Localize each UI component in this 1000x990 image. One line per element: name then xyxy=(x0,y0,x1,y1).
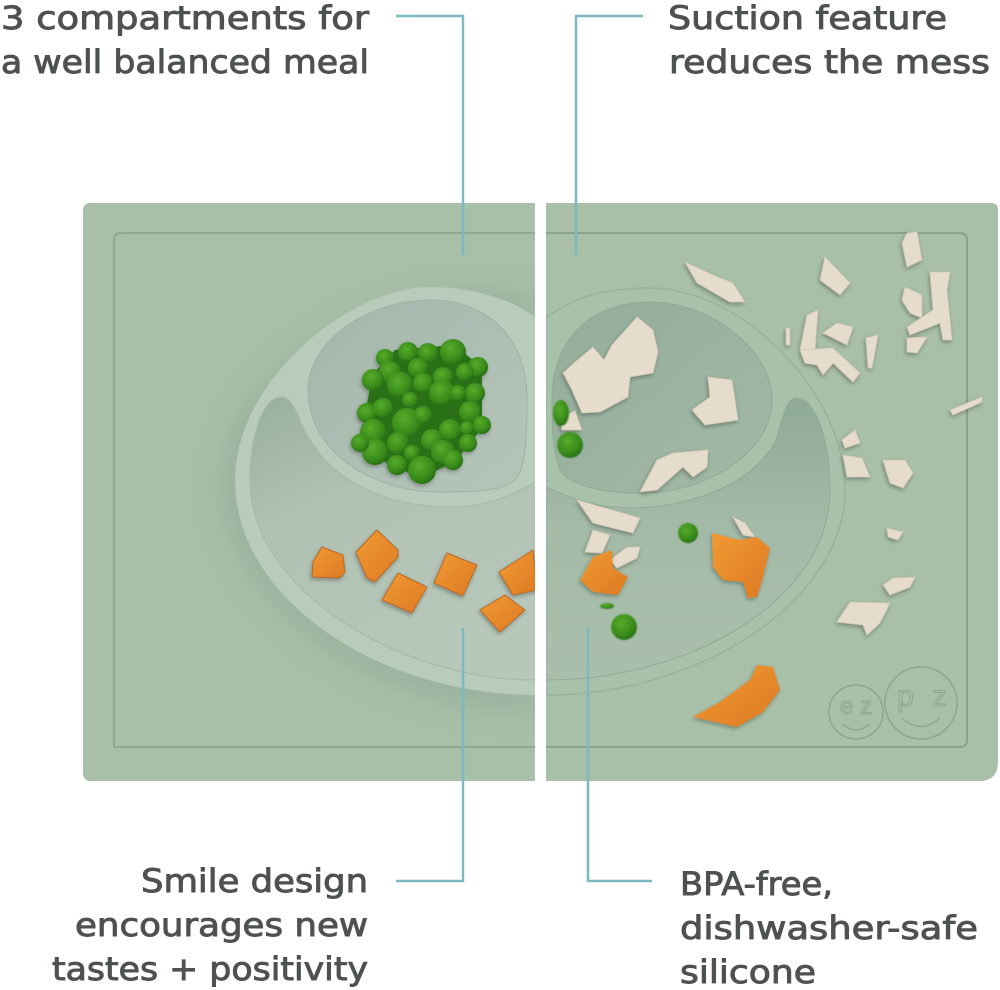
sweet potato pieces xyxy=(312,530,537,632)
logo: ezpz embossed: pz xyxy=(897,680,947,713)
callout: smile design: tastes + positivity xyxy=(52,950,368,988)
callout: silicone: BPA-free, xyxy=(680,865,833,903)
panel: left half of mat with peas and sweet potato xyxy=(83,203,553,781)
callout: smile design: encourages new xyxy=(75,906,368,944)
upper compartment left xyxy=(308,300,527,492)
green peas right xyxy=(553,400,698,640)
panel: right half of mat with scattered food xyxy=(546,203,998,781)
mat right surface xyxy=(546,203,998,781)
callout lines xyxy=(396,16,652,881)
lower compartment left xyxy=(250,397,535,680)
callout: compartments: a well balanced meal xyxy=(1,43,369,81)
bowl rim left xyxy=(235,287,535,695)
callout: silicone xyxy=(680,865,978,990)
callout: compartments xyxy=(1,0,370,81)
lower compartment right xyxy=(546,398,830,680)
callout: suction: Suction feature xyxy=(668,0,947,37)
logo: ezpz embossed: ez xyxy=(840,693,872,720)
orange food pieces xyxy=(580,533,780,727)
mat left surface xyxy=(83,203,553,781)
callout: silicone: dishwasher-safe xyxy=(680,909,978,947)
upper compartment right xyxy=(552,302,772,493)
callout: smile design xyxy=(52,862,368,988)
callout: smile design: Smile design xyxy=(141,862,368,900)
callout: suction: reduces the mess xyxy=(669,43,990,81)
logo: ezpz embossed xyxy=(829,667,957,739)
callout: suction xyxy=(668,0,990,81)
chicken pieces xyxy=(560,232,982,635)
peas xyxy=(351,339,491,484)
bowl rim right xyxy=(546,288,845,695)
callout: silicone: silicone xyxy=(680,953,816,990)
callout: compartments: 3 compartments for xyxy=(1,0,370,37)
